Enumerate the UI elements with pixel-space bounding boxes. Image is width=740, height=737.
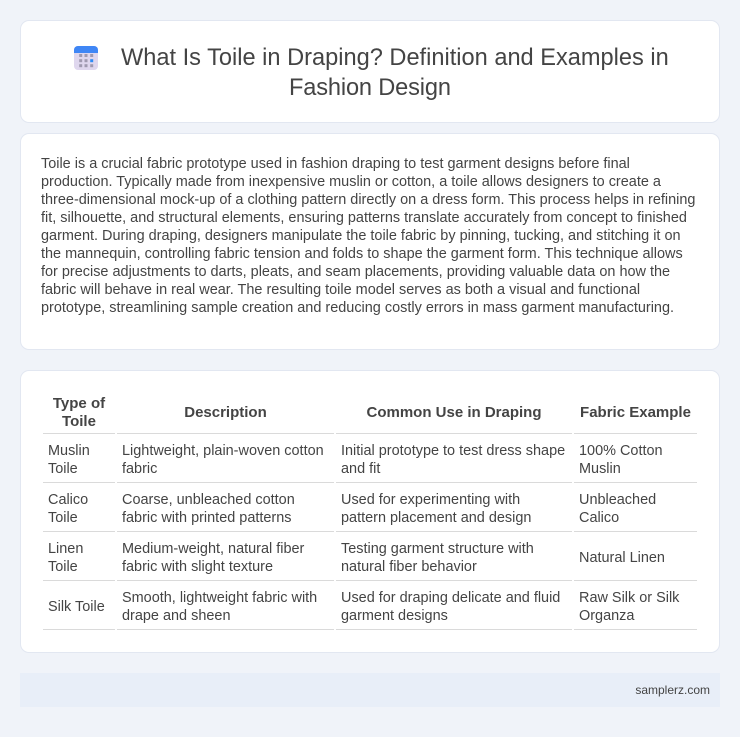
- row: linen toile: natural fiber behavior: [341, 559, 477, 575]
- panel: table: [20, 370, 720, 653]
- row: calico toile: pattern placement and design: [341, 510, 531, 526]
- definition text: garment. During draping, designers manipulate the toile fabric by pinning, tucking, and stitching it on: [41, 228, 681, 244]
- row: silk toile: Organza: [579, 608, 634, 624]
- header panel: [20, 20, 720, 123]
- column headers: Type of: [53, 395, 105, 412]
- row: muslin toile: fabric: [122, 461, 157, 477]
- title: What Is Toile in Draping? Definition and Examples in: [121, 45, 669, 71]
- definition text: fit, silhouette, and structural elements, ensuring patterns translate accurately from concept to finished: [41, 210, 687, 226]
- definition text: the mannequin, controlling fabric tension and folds to shape the garment form. This technique allows: [41, 246, 683, 262]
- row: calico toile: Coarse, unbleached cotton: [122, 492, 295, 508]
- definition text: Toile is a crucial fabric prototype used in fashion draping to test garment designs before final: [41, 156, 630, 172]
- row: linen toile: Toile: [48, 559, 78, 575]
- row: linen toile: Natural Linen: [579, 550, 665, 566]
- row: calico toile: fabric with printed patterns: [122, 510, 292, 526]
- definition text: for precise adjustments to darts, pleats, and seam placements, providing valuable data on how the: [41, 264, 670, 280]
- column headers: Description: [184, 404, 267, 421]
- panel: definition paragraph: [20, 133, 720, 350]
- row: silk toile: Silk Toile: [48, 599, 105, 615]
- definition text: prototype, streamlining sample creation and reducing costly errors in mass garment manufacturing.: [41, 300, 674, 316]
- row: silk toile: drape and sheen: [122, 608, 230, 624]
- row: silk toile: Raw Silk or Silk: [579, 590, 679, 606]
- icon: calendar: [74, 46, 98, 70]
- row: calico toile: Used for experimenting with: [341, 492, 520, 508]
- row: calico toile: Unbleached: [579, 492, 656, 508]
- row: calico toile: Calico: [579, 510, 619, 526]
- row: muslin toile: Toile: [48, 461, 78, 477]
- row: silk toile: Smooth, lightweight fabric with: [122, 590, 317, 606]
- row: linen toile: Medium-weight, natural fiber: [122, 541, 304, 557]
- row: linen toile: [48, 541, 665, 575]
- title: [121, 45, 669, 101]
- row: muslin toile: and fit: [341, 461, 380, 477]
- column headers: Toile: [62, 413, 96, 430]
- row: silk toile: garment designs: [341, 608, 448, 624]
- row: silk toile: Used for draping delicate and fluid: [341, 590, 560, 606]
- row: muslin toile: Muslin: [48, 443, 90, 459]
- definition text: fabric will behave in real wear. The resulting toile model serves as both a visual and functional: [41, 282, 640, 298]
- row: muslin toile: [48, 443, 663, 477]
- row: calico toile: Calico: [48, 492, 88, 508]
- definition text: [41, 156, 695, 316]
- row: muslin toile: Initial prototype to test dress shape: [341, 443, 565, 459]
- definition text: three-dimensional mock-up of a clothing pattern directly on a dress form. This process helps in refining: [41, 192, 695, 208]
- row: linen toile: Testing garment structure with: [341, 541, 534, 557]
- row: calico toile: Toile: [48, 510, 78, 526]
- row: muslin toile: 100% Cotton: [579, 443, 663, 459]
- row: muslin toile: Muslin: [579, 461, 621, 477]
- column headers: Fabric Example: [580, 404, 691, 421]
- table: [43, 395, 697, 630]
- column headers: [53, 395, 691, 430]
- column headers: Common Use in Draping: [366, 404, 542, 421]
- row: silk toile: [48, 590, 680, 624]
- definition text: production. Typically made from inexpensive muslin or cotton, a toile allows designers to create a: [41, 174, 661, 190]
- row: calico toile: [48, 492, 656, 526]
- footer source text: samplerz.com: [635, 683, 710, 697]
- title: Fashion Design: [289, 75, 451, 101]
- row: linen toile: Linen: [48, 541, 83, 557]
- footer bar: [20, 673, 720, 707]
- row: muslin toile: Lightweight, plain-woven cotton: [122, 443, 324, 459]
- row: linen toile: fabric with slight texture: [122, 559, 273, 575]
